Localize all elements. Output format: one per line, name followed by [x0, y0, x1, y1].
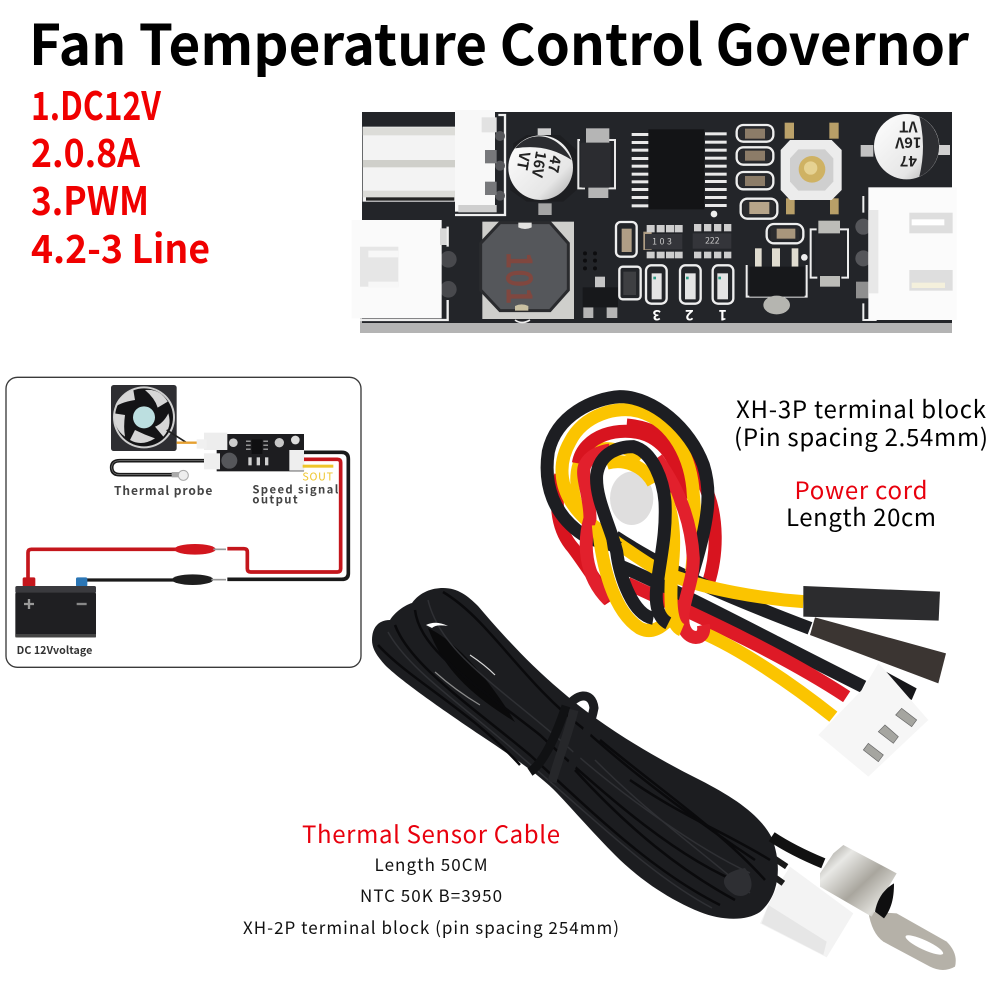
resistor networks: 103: [652, 235, 675, 247]
sensor NTC spec: NTC 50K B=3950: [360, 882, 502, 907]
red battery lead: [28, 549, 177, 580]
black battery lead: [83, 575, 177, 585]
resistor networks: [645, 224, 731, 258]
wires back layer: [547, 397, 863, 717]
title: Fan Temperature Control Governor: [29, 1, 970, 82]
sensor length: Length 50CM: [374, 851, 488, 876]
power cord length: Length 20cm: [786, 498, 936, 533]
pin spacing label: (Pin spacing 2.54mm): [734, 418, 988, 453]
spec: PWM: 3.PWM: [31, 171, 149, 227]
small capacitor: [767, 224, 803, 243]
battery voltage label: DC 12Vvoltage: [17, 643, 92, 658]
circuit board photo: [352, 110, 957, 333]
terminal block label: XH-3P terminal block: [736, 390, 986, 425]
red alligator clip: [174, 544, 226, 555]
thermal probe: [112, 461, 212, 499]
SMD parts column: [737, 125, 777, 219]
capacitor: right: 16V: [894, 133, 922, 154]
spec: wires: 4.2-3 Line: [31, 219, 210, 275]
mini controller board: [197, 433, 304, 471]
resistor networks: 222: [705, 235, 720, 247]
capacitor: right: 47: [900, 151, 917, 172]
white 3-pin plug: [818, 663, 928, 777]
connector: right: [855, 187, 957, 320]
thermal sensor cable heading: Thermal Sensor Cable: [302, 815, 560, 850]
capacitor: left: 47: [543, 154, 567, 175]
small capacitor parts: [616, 222, 652, 299]
IC chip: [648, 129, 727, 217]
cable bundle: [372, 588, 778, 919]
icon: cooling fan: [111, 385, 198, 451]
dupont connector: yellow wire: [803, 586, 940, 621]
status LEDs: 3: [652, 305, 661, 326]
IC pins: left side: [632, 133, 650, 207]
diode: lower: [811, 221, 848, 287]
inductor: 101: [496, 252, 548, 305]
inductor: [481, 222, 574, 322]
thermal probe: Thermal probe: [114, 482, 212, 499]
speed signal output: [252, 465, 339, 507]
spec: voltage: 1.DC12V: [31, 76, 162, 132]
connector: top left: [363, 110, 505, 215]
capacitor: right: VT: [899, 117, 918, 138]
connector: bottom left: [352, 220, 457, 320]
push button: [781, 123, 842, 214]
thermal sensor cable: [372, 588, 956, 970]
wiring diagram panel: [6, 377, 361, 667]
cable tie: [530, 696, 594, 782]
power cord with connectors: [547, 397, 946, 777]
spec: current: 2.0.8A: [31, 123, 141, 179]
capacitor: left: 16V: [527, 149, 552, 180]
board: left half parts: [352, 110, 652, 322]
shadow inside loop: [610, 472, 653, 525]
status LEDs: 1: [718, 305, 727, 326]
regulator: [747, 248, 808, 314]
black alligator clip: [172, 574, 226, 585]
transistor: [583, 277, 618, 318]
capacitor: left: VT: [512, 149, 536, 172]
capacitor: left: [508, 128, 577, 215]
status LEDs: 2: [685, 305, 694, 326]
speed signal output: output: [252, 491, 298, 507]
via dots: [583, 251, 597, 270]
dupont connector: black wire: [810, 617, 946, 683]
icon: battery: [15, 577, 96, 637]
metal ring terminal and lead: [772, 837, 956, 970]
speed signal output: Speed signal: [252, 481, 339, 497]
capacitor: right: [861, 114, 950, 179]
speed signal output: SOUT: [302, 469, 334, 484]
status LEDs: [646, 265, 733, 326]
red wire: [227, 459, 341, 572]
diode: upper: [578, 128, 615, 198]
board: right half parts: [645, 114, 957, 326]
sensor terminal block: XH-2P terminal block (pin spacing 254mm): [243, 914, 619, 939]
black wire: [227, 452, 348, 579]
power cord heading: Power cord: [794, 471, 928, 506]
spec list: [31, 76, 210, 275]
white 2-pin connector: [760, 857, 853, 957]
dupont connector: hidden tip: [873, 667, 917, 700]
